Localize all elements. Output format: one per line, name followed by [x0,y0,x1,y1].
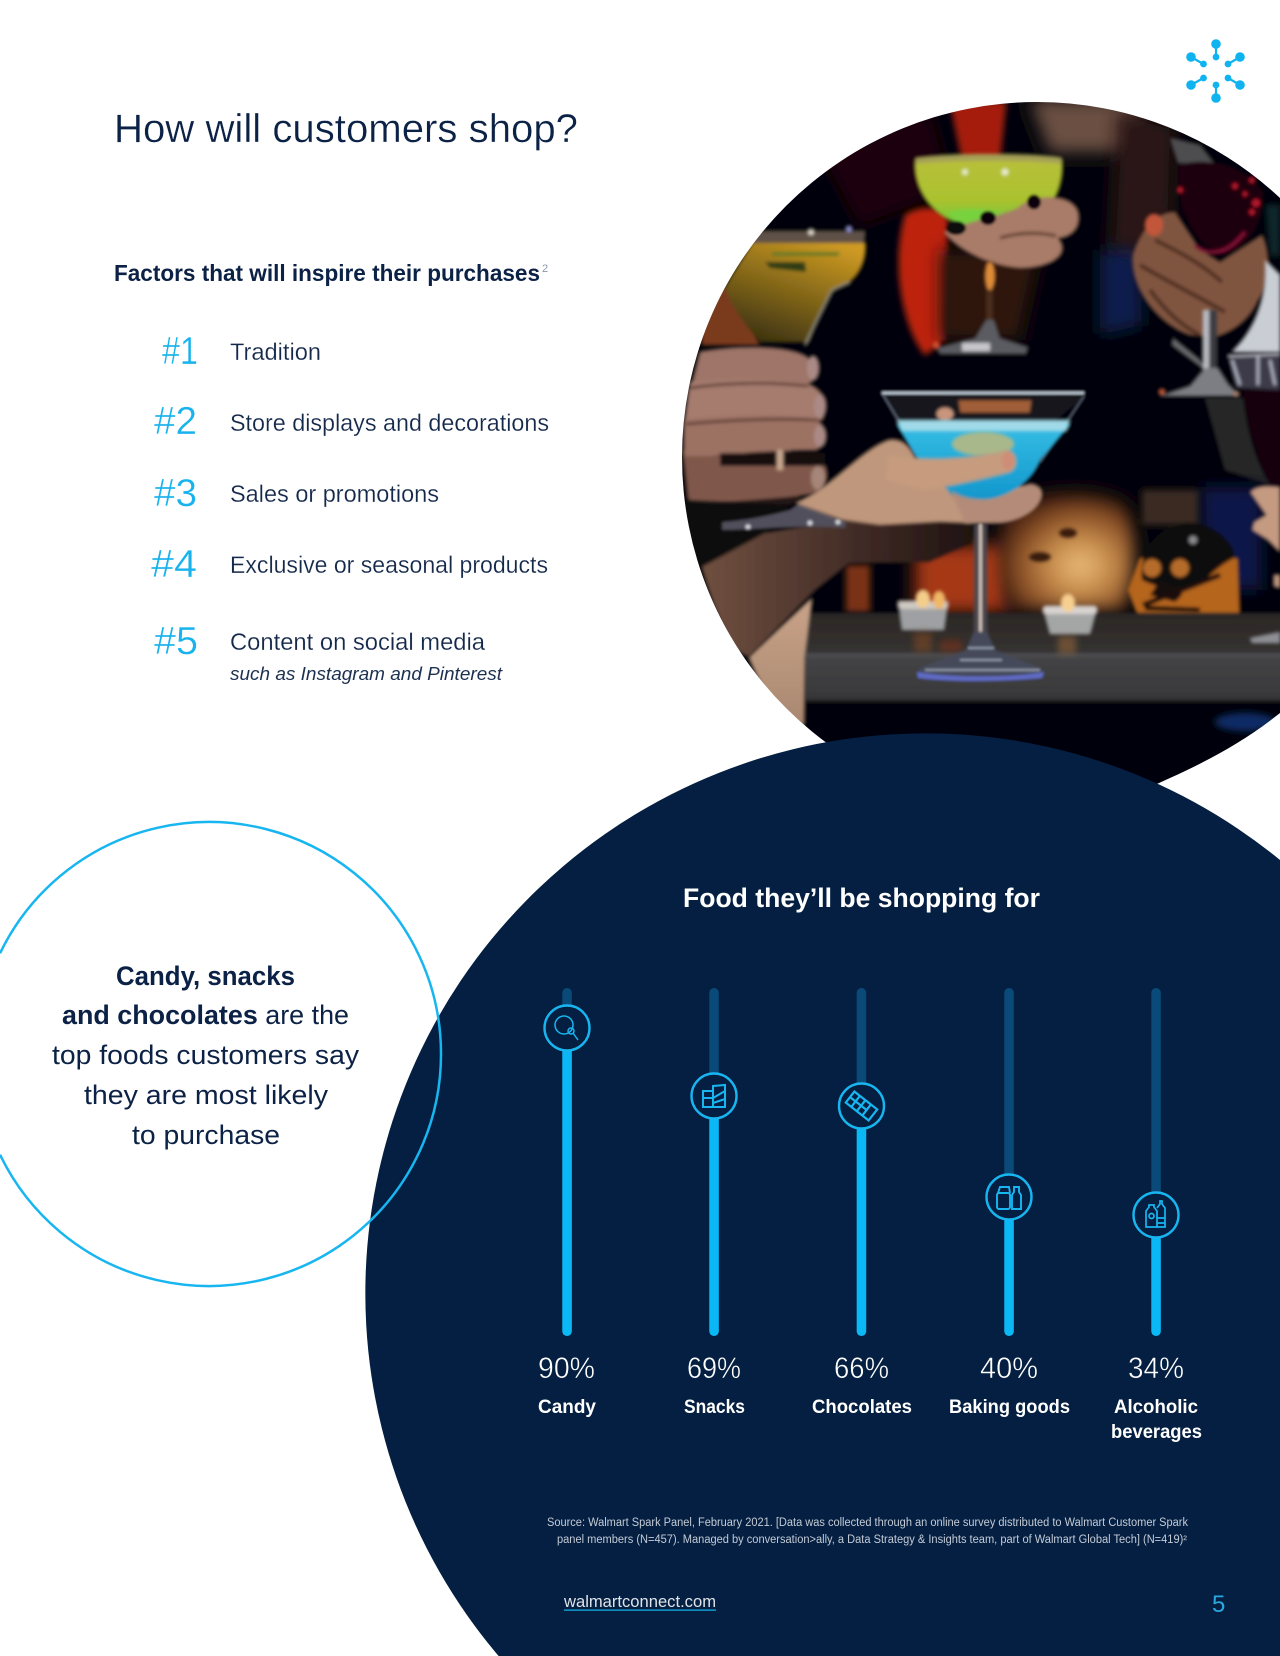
logo: spark icon [1186,39,1245,103]
heading: food: Food they’ll be shopping for [683,883,1040,913]
bar: baking goods 40% [986,988,1032,1336]
percentages: 90% [538,1352,595,1385]
category labels [538,1396,1202,1443]
factor 3: Sales or promotions [230,481,439,508]
heading: factors: Factors that will inspire their purchases [114,260,540,286]
page number: 5 [1212,1591,1225,1618]
olive cocktail [702,226,865,345]
navy circle panel [365,733,1280,1656]
callout text in outline circle: to purchase [132,1120,280,1150]
glass base at left [722,503,846,530]
factor 2: #2 [154,400,197,443]
factor 1 [162,330,321,373]
right hand fragment and far glass base [1250,486,1280,643]
factor 1: Tradition [230,339,321,366]
table surface [805,613,1280,731]
factor 5 [154,620,503,684]
orange glow behind hand [846,545,1008,612]
category labels: Chocolates [812,1396,912,1418]
pumpkin [999,494,1134,610]
percentages: 69% [687,1352,741,1385]
lime cocktail [915,154,1062,228]
callout text in outline circle [52,961,360,1150]
percentages: 40% [980,1352,1038,1385]
bare arm under [749,598,812,725]
callout text in outline circle: Candy, snacks [116,961,295,991]
source note: Source: Walmart Spark Panel, February 2021. [Data was collected through an online survey distributed to Walmart Customer Spark [547,1517,1188,1529]
factor 5: #5 [154,620,198,663]
skull bottle [1128,490,1240,634]
factor 2: Store displays and decorations [230,410,549,437]
cyan outline circle [0,822,441,1286]
category labels: Candy [538,1396,596,1418]
percentages: 34% [1128,1352,1184,1385]
bar: chocolates 66% [839,988,884,1336]
white cuff [1232,260,1280,352]
photo: Halloween cocktails in a circle [670,90,1280,820]
callout text in outline circle: they are most likely [84,1080,329,1110]
callout text in outline circle: top foods customers say [52,1040,360,1070]
category labels: Snacks [684,1396,745,1418]
callout text in outline circle: and chocolates are the [62,1000,349,1030]
factor 2 [154,400,549,443]
title: How will customers shop? [114,107,578,151]
factor 5: such as Instagram and Pinterest [230,663,503,684]
martini stem and base [974,524,987,636]
factor 5: Content on social media [230,629,486,656]
right wine glass and hand [1133,138,1268,337]
category labels: beverages [1111,1421,1202,1443]
bar: alcoholic beverages 34% [1134,988,1178,1336]
source note: panel members (N=457). Managed by conversation>ally, a Data Strategy & Insights team, part of Walmart Global Tech] (N=419)² [557,1534,1187,1546]
percentages [538,1352,1184,1385]
factor 1: #1 [162,330,198,373]
percentages: 66% [834,1352,889,1385]
blue backdrop [1200,487,1262,590]
right glass stem and base [1159,310,1240,397]
hairy forearm [680,500,972,657]
factor 3: #3 [154,472,197,515]
hair and clothing backdrop [820,100,1280,355]
thumb over glass [912,448,1019,489]
factor 4 [151,543,548,586]
category labels: Alcoholic [1114,1396,1198,1418]
dark wine glass at right [1205,354,1280,490]
bar chart: food purchases [544,988,1178,1336]
footer link: walmartconnect.com [563,1592,716,1611]
hand holding blue martini [795,440,1041,525]
factor 3 [154,472,439,515]
left hand fingers [682,344,831,508]
bar: candy 90% [544,988,590,1336]
source note [547,1517,1188,1546]
heading: factors: 2 [542,263,548,275]
ranked list of factors [151,330,549,684]
factor 4: Exclusive or seasonal products [230,552,548,579]
stem and base behind [932,262,1028,354]
hand holding lime cocktail [944,197,1079,268]
blue martini glass [882,393,1084,681]
bar: snacks 69% [692,988,736,1336]
factor 4: #4 [151,543,197,586]
category labels: Baking goods [949,1396,1070,1418]
candles [898,590,1097,654]
